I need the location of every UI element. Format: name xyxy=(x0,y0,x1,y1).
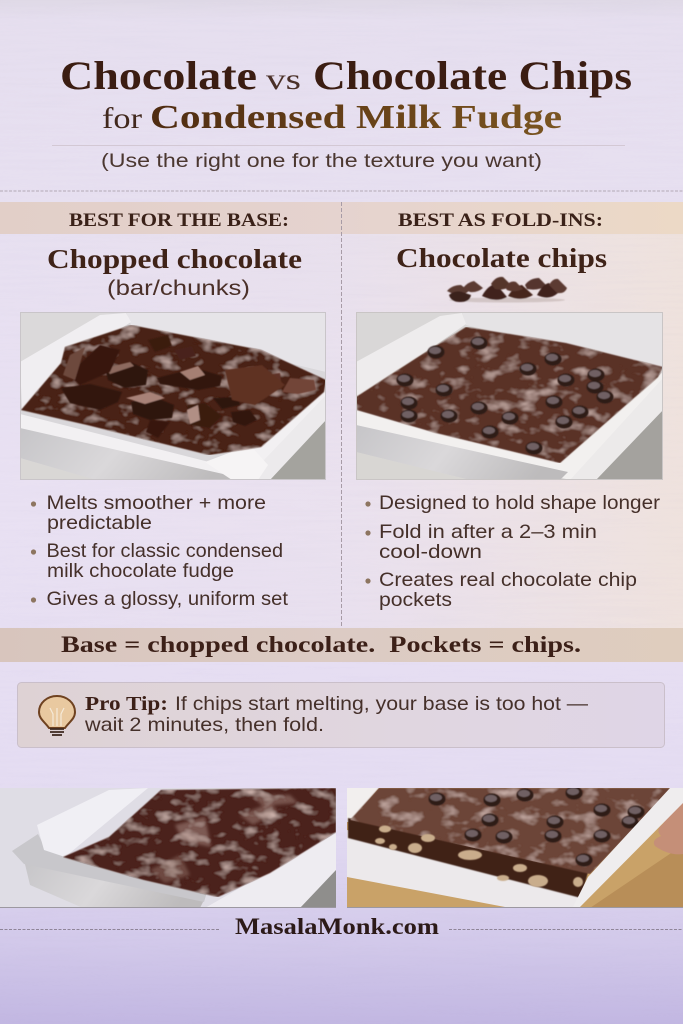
heading: chopped chocolate: (bar/chunks) xyxy=(107,277,250,300)
list: chopped chocolate benefits: predictable xyxy=(47,512,152,534)
title: Chocolate xyxy=(60,53,257,98)
panel: column headers: BEST FOR THE BASE: xyxy=(69,211,289,231)
subtitle: (Use the right one for the texture you want) xyxy=(101,150,542,172)
callout: pro tip: If chips start melting, your base is too hot — xyxy=(175,693,589,715)
photo: chopped chocolate in pan xyxy=(20,312,326,480)
title: Condensed Milk Fudge xyxy=(150,99,562,136)
photo: chocolate chips in pan xyxy=(356,312,663,480)
photo: melted fudge in pan xyxy=(0,788,336,908)
summary band: Base = chopped chocolate. Pockets = chips. xyxy=(61,632,581,657)
panel: column headers: BEST AS FOLD-INS: xyxy=(398,211,603,231)
list: chocolate chip benefits: pockets xyxy=(379,589,452,611)
list: chopped chocolate benefits: Melts smoother + more xyxy=(46,492,266,514)
list: chopped chocolate benefits: milk chocolate fudge xyxy=(47,560,234,582)
heading: chocolate chips: Chocolate chips xyxy=(396,243,607,273)
callout: pro tip: Pro Tip: xyxy=(85,693,168,715)
footer: website: MasalaMonk.com xyxy=(235,914,439,939)
list: chocolate chip benefits: Designed to hold shape longer xyxy=(379,492,661,514)
list: chopped chocolate benefits xyxy=(31,492,289,610)
title: for xyxy=(102,102,142,135)
list: chopped chocolate benefits: Best for classic condensed xyxy=(46,540,283,562)
photo: sliced fudge with chips xyxy=(347,786,683,908)
panel: column headers xyxy=(0,202,683,234)
callout: pro tip xyxy=(18,682,664,748)
nuts in slice xyxy=(375,826,583,887)
panel: chopped chocolate xyxy=(20,244,326,610)
list: chocolate chip benefits: cool-down xyxy=(379,541,482,563)
title: Chocolate Chips xyxy=(313,53,632,98)
summary band xyxy=(0,628,683,662)
list: chocolate chip benefits: Fold in after a 2–3 min xyxy=(379,521,597,543)
icon: light bulb xyxy=(39,696,75,735)
title xyxy=(60,53,632,136)
panel: chocolate chips xyxy=(356,243,663,611)
heading: chopped chocolate xyxy=(47,244,302,300)
heading: chopped chocolate: Chopped chocolate xyxy=(47,244,302,274)
callout: pro tip: wait 2 minutes, then fold. xyxy=(84,714,324,736)
list: chocolate chip benefits xyxy=(365,492,661,611)
title: vs xyxy=(266,63,301,96)
list: chocolate chip benefits: Creates real chocolate chip xyxy=(379,569,637,591)
list: chopped chocolate benefits: Gives a glossy, uniform set xyxy=(46,588,289,610)
icon: pile of chocolate chips xyxy=(447,277,567,302)
